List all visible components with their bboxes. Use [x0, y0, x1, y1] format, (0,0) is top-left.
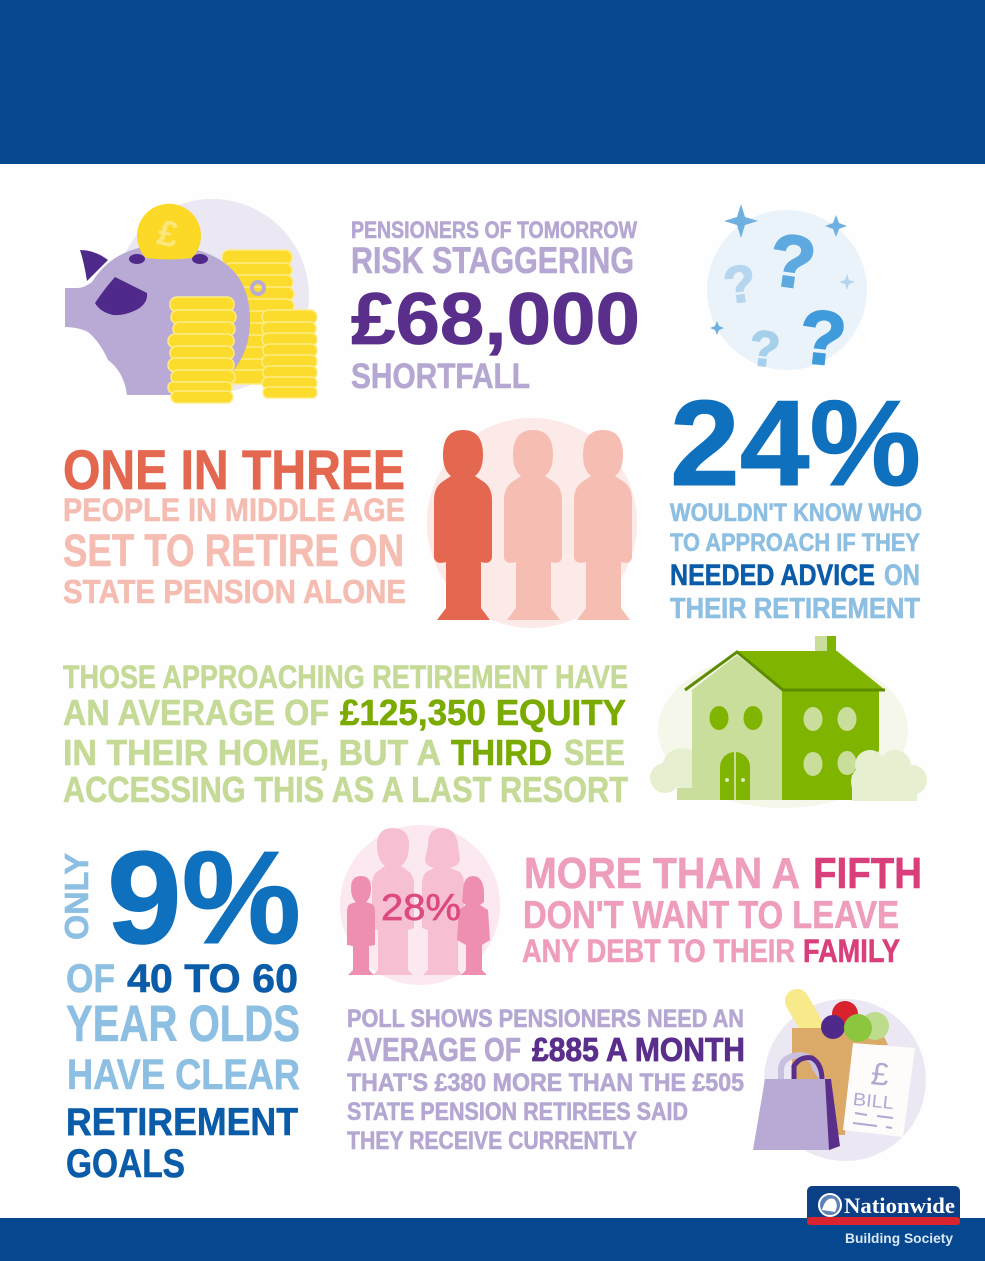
icon: family 28% — [340, 825, 500, 985]
text: one in three: ONE IN THREE — [63, 438, 405, 501]
text: more than a fifth: FIFTH — [813, 849, 922, 898]
chimney — [815, 636, 827, 660]
pig body — [65, 245, 250, 395]
icon: question marks: ? — [795, 294, 850, 383]
child — [347, 876, 375, 975]
pig eye patch — [95, 277, 147, 315]
text: only 9%: ONLY — [58, 853, 95, 940]
falling pound coin — [137, 204, 201, 260]
icon: question marks — [707, 204, 867, 383]
person — [574, 430, 632, 620]
bush left — [650, 748, 718, 798]
receipt — [843, 1043, 915, 1137]
text: £68,000 shortfall: RISK STAGGERING — [351, 240, 634, 281]
text: 24%: TO APPROACH IF THEY — [670, 529, 920, 557]
logo: Nationwide Building Society: Building Society — [845, 1230, 953, 1246]
text: more than a fifth — [522, 849, 922, 969]
coin slot — [129, 254, 145, 264]
text: only 9% — [58, 824, 301, 1186]
text: £68,000 shortfall: SHORTFALL — [351, 357, 530, 396]
text: home equity: THOSE APPROACHING RETIREMENT HAVE — [63, 659, 628, 695]
text: home equity: SEE — [564, 732, 625, 773]
text: £68,000 shortfall — [351, 217, 640, 396]
windows — [710, 706, 762, 730]
text: £885 a month: £885 A MONTH — [532, 1031, 745, 1068]
text: home equity: £125,350 EQUITY — [340, 692, 626, 733]
right coin stack — [262, 310, 317, 398]
paper bag — [792, 1028, 888, 1135]
door — [720, 752, 750, 800]
text: 24%: WOULDN'T KNOW WHO — [670, 499, 922, 527]
adult — [372, 828, 414, 975]
text: 24%: 24% — [670, 375, 921, 511]
right wall — [782, 690, 879, 800]
text: £885 a month: POLL SHOWS PENSIONERS NEED AN — [347, 1005, 744, 1033]
receipt: BILL — [852, 1089, 895, 1113]
receipt: £ — [869, 1055, 891, 1093]
text: home equity: AN AVERAGE OF — [63, 692, 329, 733]
text: 24%: ON — [884, 559, 920, 592]
text: more than a fifth: DON'T WANT TO LEAVE — [523, 894, 899, 937]
logo: Nationwide Building Society — [807, 1186, 960, 1246]
icon: question marks: ? — [720, 254, 760, 316]
icon: three people — [427, 418, 637, 628]
front coin stack — [168, 297, 236, 403]
person highlighted — [434, 430, 492, 620]
icon: shopping bags and bill — [753, 999, 926, 1161]
text: £68,000 shortfall: £68,000 — [351, 279, 640, 360]
text: one in three — [63, 438, 406, 610]
text: £885 a month — [347, 1005, 745, 1155]
text: 24% — [670, 375, 922, 625]
text: £885 a month: THAT'S £380 MORE THAN THE £505 — [347, 1069, 744, 1097]
adult with long hair — [422, 828, 464, 975]
text: home equity: THIRD — [451, 732, 552, 773]
text: only 9%: OF — [66, 957, 115, 1001]
icon: piggy bank with coins: £ — [154, 211, 182, 256]
pig tail — [252, 282, 264, 294]
text: one in three: STATE PENSION ALONE — [63, 573, 406, 610]
text: only 9%: YEAR OLDS — [66, 995, 300, 1052]
header band — [0, 0, 985, 164]
back coin stack — [222, 250, 294, 384]
person — [504, 430, 562, 620]
bush right — [851, 750, 927, 801]
text: one in three: PEOPLE IN MIDDLE AGE — [63, 492, 405, 528]
text: only 9%: RETIREMENT — [66, 1101, 298, 1144]
fruit — [832, 1001, 858, 1027]
icon: house — [650, 636, 927, 808]
footer band — [0, 1218, 985, 1261]
child with hair — [457, 876, 490, 975]
text: only 9%: 9% — [107, 824, 301, 971]
baguette — [797, 1001, 812, 1027]
roof — [737, 651, 885, 690]
text: £885 a month: THEY RECEIVE CURRENTLY — [347, 1127, 637, 1155]
text: only 9%: GOALS — [66, 1142, 185, 1186]
text: more than a fifth: ANY DEBT TO THEIR — [522, 933, 795, 969]
text: home equity — [63, 659, 628, 810]
handbag — [781, 1055, 823, 1080]
icon: question marks: ? — [764, 217, 821, 306]
text: only 9%: 40 TO 60 — [127, 957, 298, 1001]
icon: piggy bank with coins — [65, 199, 317, 403]
text: more than a fifth: MORE THAN A — [524, 849, 800, 898]
text: only 9%: HAVE CLEAR — [67, 1051, 300, 1099]
percentage label: 28% — [381, 887, 461, 928]
text: £68,000 shortfall: PENSIONERS OF TOMORROW — [351, 217, 637, 244]
icon: question marks: ? — [746, 320, 783, 378]
text: one in three: SET TO RETIRE ON — [63, 525, 404, 576]
text: 24%: NEEDED ADVICE — [670, 559, 875, 592]
text: home equity: ACCESSING THIS AS A LAST RESORT — [63, 769, 628, 810]
text: 24%: THEIR RETIREMENT — [670, 593, 920, 625]
left wall — [677, 655, 782, 800]
logo: Nationwide Building Society: Nationwide — [844, 1193, 955, 1218]
pig ear — [80, 250, 108, 281]
text: more than a fifth: FAMILY — [803, 933, 900, 969]
text: £885 a month: STATE PENSION RETIREES SAID — [347, 1098, 688, 1126]
text: £885 a month: AVERAGE OF — [347, 1031, 521, 1068]
text: home equity: IN THEIR HOME, BUT A — [63, 732, 441, 773]
